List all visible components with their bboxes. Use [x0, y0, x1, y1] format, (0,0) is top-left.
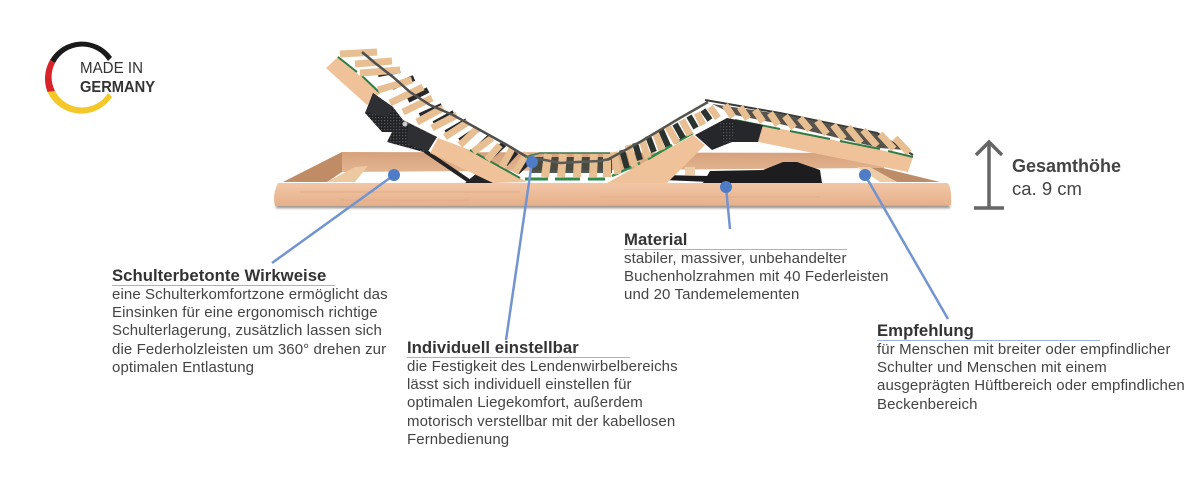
total height label: ca. 9 cm [1012, 178, 1082, 199]
logo: made in germany: MADE IN [80, 60, 143, 77]
text block: Material [624, 230, 889, 303]
right section bracket [695, 118, 763, 150]
text block: Schulterbetonte Wirkweise: optimalen Entlastung [112, 359, 254, 376]
text block: Material: Buchenholzrahmen mit 40 Federleisten [624, 268, 889, 285]
text block: Empfehlung: für Menschen mit breiter oder empfindlicher [877, 341, 1171, 358]
head section slats [340, 52, 530, 173]
arm and foot of head section [425, 151, 493, 183]
arrow: total height [974, 142, 1004, 208]
text block: Schulterbetonte Wirkweise: die Federholzleisten um 360° drehen zur [112, 341, 386, 358]
text block: Individuell einstellbar: Fernbedienung [407, 431, 509, 448]
logo: made in germany [45, 42, 156, 114]
total height label [1012, 156, 1121, 199]
text block: Empfehlung: Beckenbereich [877, 396, 978, 413]
motor [640, 162, 822, 183]
logo: made in germany: GERMANY [80, 79, 156, 96]
bed frame: base [274, 152, 951, 208]
text block: Individuell einstellbar [407, 338, 678, 448]
right section [705, 100, 913, 172]
text block: Individuell einstellbar: motorisch verstellbar mit der kabellosen [407, 413, 675, 430]
text block: Schulterbetonte Wirkweise: eine Schulterkomfortzone ermöglicht das [112, 286, 388, 303]
total height label: Gesamthöhe [1012, 156, 1121, 176]
text block: Individuell einstellbar: lässt sich individuell einstellen für [407, 376, 632, 393]
text block: Schulterbetonte Wirkweise: Schulterlagerung, zusätzlich lassen sich [112, 322, 382, 339]
text block: Individuell einstellbar: Individuell einstellbar [407, 338, 579, 357]
text block: Schulterbetonte Wirkweise [112, 266, 388, 376]
text block: Empfehlung [877, 321, 1185, 413]
text block: Schulterbetonte Wirkweise: Schulterbetonte Wirkweise [112, 266, 326, 285]
text block: Material: stabiler, massiver, unbehandelter [624, 250, 847, 267]
head section brackets [365, 93, 437, 153]
text block: Empfehlung: ausgeprägten Hüftbereich oder empfindlichen [877, 377, 1185, 394]
leader line: Empfehlung [859, 169, 948, 319]
text block: Individuell einstellbar: optimalen Liegekomfort, außerdem [407, 394, 643, 411]
head section side beam [326, 57, 527, 183]
leader line: Individuell einstellbar [506, 156, 538, 340]
text block: Individuell einstellbar: die Festigkeit des Lendenwirbelbereichs [407, 358, 678, 375]
leader line: Schulterbetonte Wirkweise [272, 169, 400, 263]
text block: Empfehlung: Empfehlung [877, 321, 974, 340]
text block: Material: und 20 Tandemelementen [624, 286, 799, 303]
text block: Material: Material [624, 230, 687, 249]
leader line: Material [720, 181, 732, 229]
rising section [607, 102, 718, 183]
text block: Schulterbetonte Wirkweise: Einsinken für eine ergonomisch richtige [112, 304, 378, 321]
text block: Empfehlung: Schulter und Menschen mit einem [877, 359, 1107, 376]
middle section slats [525, 153, 614, 179]
